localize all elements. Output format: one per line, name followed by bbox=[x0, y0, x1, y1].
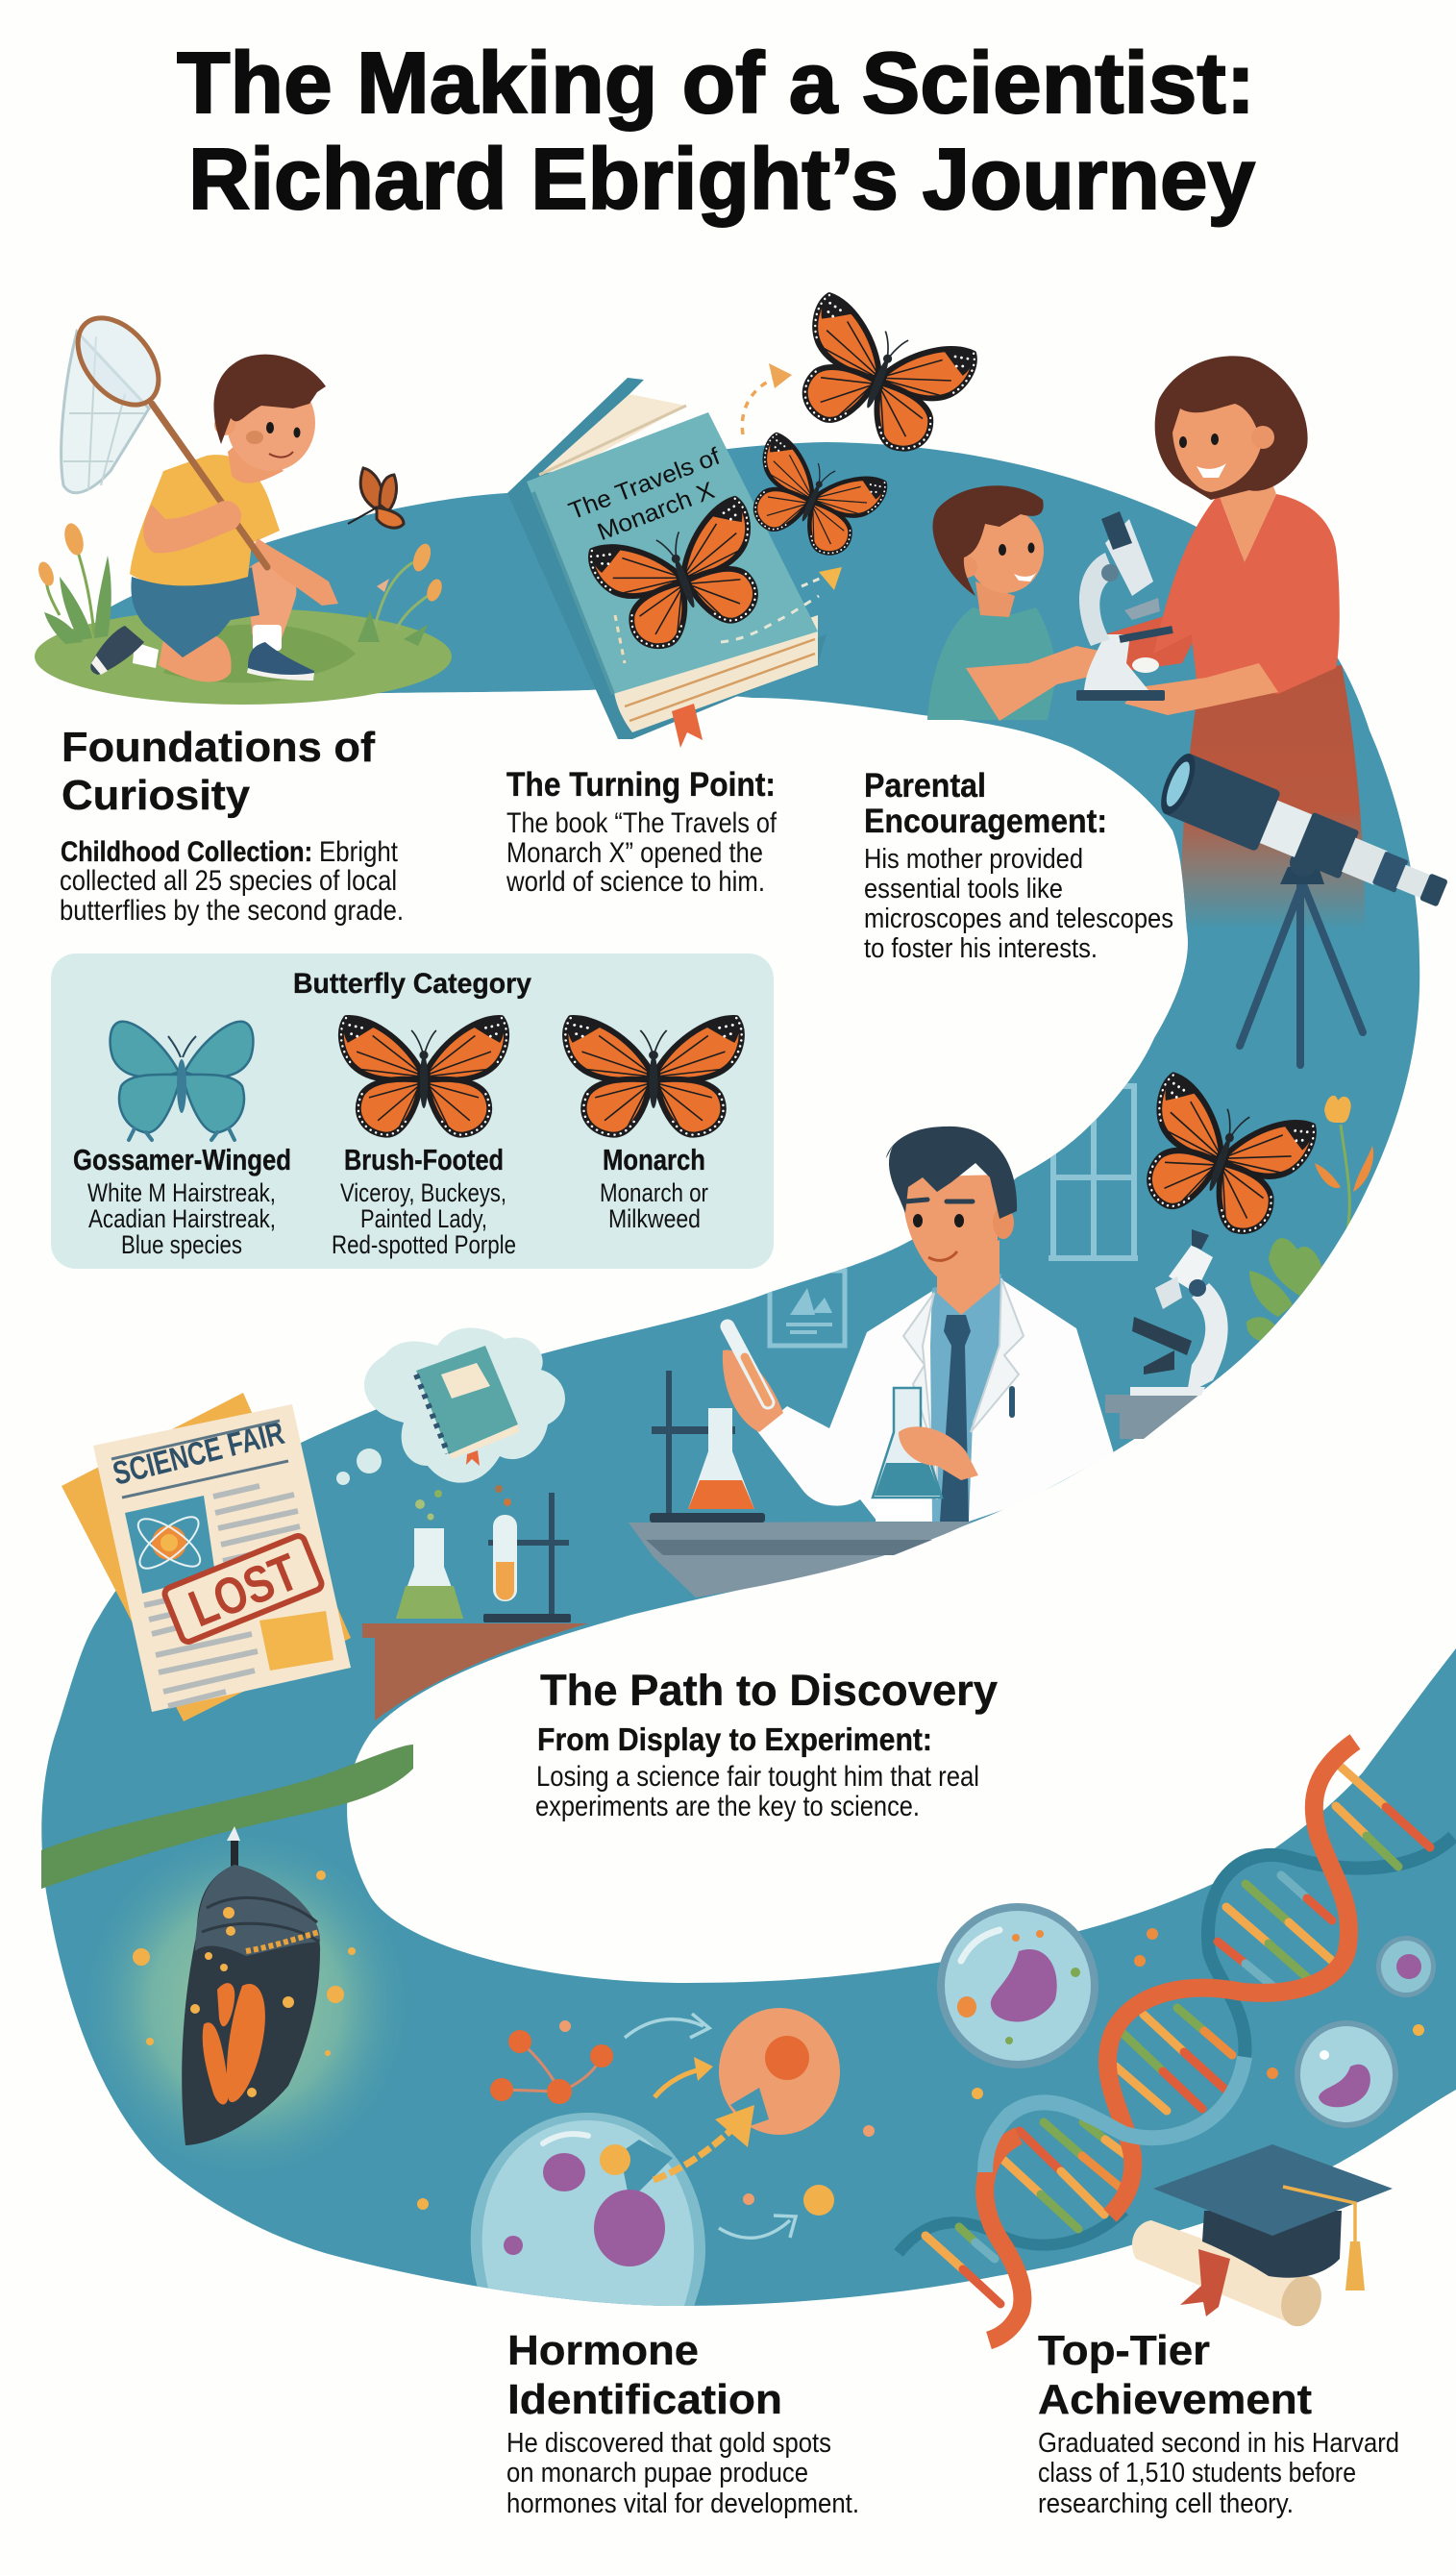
bookmark bbox=[672, 704, 703, 748]
thought cloud with notebook bbox=[336, 1327, 565, 1485]
category: brush-footed: Viceroy, Buckeys, bbox=[340, 1178, 506, 1207]
panel heading: Butterfly Category bbox=[293, 968, 531, 1000]
section: the path to discovery: From Display to Experiment: bbox=[537, 1721, 932, 1757]
section: foundations of curiosity: Curiosity bbox=[62, 772, 251, 819]
butterfly by the window bbox=[1126, 1074, 1318, 1245]
section: the turning point: Monarch X” opened the bbox=[506, 837, 763, 869]
section: top-tier achievement: class of 1,510 students before bbox=[1038, 2458, 1356, 2488]
illustration: mother bbox=[1076, 356, 1365, 929]
mother sleeve behind microscope bbox=[1105, 577, 1201, 673]
category: monarch: Monarch bbox=[603, 1143, 705, 1176]
book title: Monarch X bbox=[594, 477, 719, 546]
window bbox=[1049, 1086, 1138, 1259]
illustration: telescope on tripod bbox=[1154, 749, 1455, 1065]
green flask bbox=[396, 1490, 463, 1619]
molecule bbox=[490, 2020, 613, 2104]
lapels bbox=[903, 1278, 1024, 1499]
illustration: school lab bench with flask and test tube bbox=[362, 1485, 588, 1721]
butterfly net bbox=[62, 303, 175, 493]
tie bbox=[940, 1315, 971, 1522]
mother head bbox=[1155, 356, 1308, 500]
helix rungs bbox=[925, 1768, 1430, 2304]
silk stem bbox=[231, 1836, 238, 1869]
lab microscope bbox=[1130, 1229, 1228, 1396]
section: the path to discovery: The Path to Discovery bbox=[540, 1666, 998, 1715]
mother hands bbox=[1124, 663, 1278, 715]
wall picture bbox=[770, 1271, 845, 1346]
tiny cell bbox=[1376, 1936, 1436, 1997]
section: hormone identification: Identification bbox=[507, 2376, 782, 2423]
boy arms bbox=[143, 505, 238, 553]
test tube stand bbox=[483, 1485, 571, 1622]
gold ball bbox=[600, 2144, 630, 2175]
section: the turning point: The Turning Point: bbox=[506, 766, 776, 804]
section: top-tier achievement: researching cell theory. bbox=[1038, 2488, 1294, 2519]
book cover butterfly bbox=[587, 497, 778, 659]
large cell bbox=[937, 1903, 1098, 2068]
category: brush-footed: Brush-Footed bbox=[344, 1143, 504, 1176]
flying monarch butterfly, small bbox=[737, 433, 888, 565]
wooden table bbox=[362, 1623, 588, 1721]
section: parental encouragement: Encouragement: bbox=[864, 803, 1107, 840]
category: gossamer-winged bbox=[73, 1022, 291, 1259]
section: hormone identification: He discovered that gold spots bbox=[506, 2428, 831, 2459]
second boy shirt bbox=[927, 607, 1057, 720]
gold spots bbox=[133, 1870, 429, 2210]
large pale cell bbox=[471, 2113, 705, 2326]
orange flask on stand bbox=[650, 1371, 765, 1523]
branch bbox=[41, 1745, 413, 1889]
section: foundations of curiosity: collected all 25 species of local bbox=[60, 865, 397, 897]
blue flask with hand bbox=[873, 1388, 978, 1522]
section: foundations of curiosity: butterflies by the second grade. bbox=[60, 895, 404, 927]
table, right bbox=[1105, 1395, 1199, 1439]
blue strand bbox=[985, 2057, 1245, 2172]
orange cell bbox=[719, 2008, 840, 2135]
section: the turning point bbox=[506, 766, 777, 898]
panel: butterfly category bbox=[51, 953, 774, 1269]
mother dress bbox=[1153, 494, 1340, 694]
chrysalis upper segments bbox=[195, 1865, 320, 1956]
scientist head bbox=[886, 1127, 1017, 1315]
small cell bbox=[1295, 2020, 1398, 2128]
notebook icon bbox=[416, 1346, 519, 1466]
category: gossamer-winged: Blue species bbox=[121, 1230, 242, 1259]
category: brush-footed bbox=[332, 1018, 516, 1259]
section: top-tier achievement: Graduated second in his Harvard bbox=[1038, 2428, 1399, 2459]
lab coat bbox=[757, 1279, 1114, 1522]
second boy arm bbox=[966, 646, 1113, 721]
section: parental encouragement: Parental bbox=[864, 767, 986, 805]
section: top-tier achievement: Achievement bbox=[1038, 2376, 1312, 2423]
coat pen bbox=[1009, 1389, 1015, 1415]
section: foundations of curiosity: Foundations of bbox=[62, 724, 375, 771]
category: brush-footed: Painted Lady, bbox=[360, 1204, 487, 1233]
illustration: DNA helix and cells bbox=[899, 1742, 1453, 2340]
small butterfly near the boy bbox=[348, 468, 404, 528]
hand with test tube bbox=[723, 1326, 783, 1432]
illustration: diploma scroll bbox=[1132, 2220, 1328, 2332]
book title bbox=[565, 443, 734, 553]
section: the path to discovery: Losing a science fair tought him that real bbox=[536, 1761, 979, 1793]
chrysalis body bbox=[182, 1865, 320, 2145]
section: top-tier achievement bbox=[1038, 2327, 1399, 2519]
section: the path to discovery bbox=[535, 1666, 998, 1822]
mother neck bbox=[1219, 461, 1276, 562]
section: top-tier achievement: Top-Tier bbox=[1038, 2327, 1210, 2374]
category: brush-footed: Red-spotted Porple bbox=[332, 1230, 516, 1259]
section: the turning point: world of science to him. bbox=[506, 866, 765, 898]
section: foundations of curiosity: Childhood Collection: bbox=[61, 836, 312, 868]
dashed arrows bbox=[742, 363, 842, 590]
section: foundations of curiosity bbox=[60, 724, 404, 927]
illustration: boy with butterfly net on grass bbox=[35, 303, 452, 705]
illustration: chrysalis on branch bbox=[41, 1745, 429, 2210]
illustration: hormone cells bbox=[471, 2008, 983, 2326]
gold particles bbox=[743, 2088, 983, 2216]
category: gossamer-winged: Acadian Hairstreak, bbox=[88, 1204, 276, 1233]
illustration: science fair newspaper bbox=[62, 1393, 351, 1721]
second boy head bbox=[933, 485, 1044, 617]
winding ribbon path bbox=[41, 442, 1456, 2306]
illustration: The Travels of Monarch X book bbox=[507, 378, 827, 748]
illustration: graduation cap bbox=[1153, 2144, 1393, 2290]
mother skirt bbox=[1180, 665, 1365, 929]
headline: SCIENCE FAIR bbox=[110, 1415, 288, 1493]
section: hormone identification bbox=[506, 2327, 859, 2519]
atom image bbox=[125, 1496, 215, 1594]
glow bbox=[106, 1856, 386, 2153]
boy shirt bbox=[130, 455, 280, 585]
section: hormone identification: hormones vital for development. bbox=[506, 2488, 859, 2519]
microscope held by mother and boy bbox=[1076, 511, 1172, 701]
shirt and collar bbox=[930, 1274, 1001, 1522]
section: parental encouragement bbox=[864, 767, 1173, 964]
orange strand bbox=[1107, 1742, 1355, 2216]
category: gossamer-winged: Gossamer-Winged bbox=[73, 1143, 291, 1176]
section: the turning point: The book “The Travels of bbox=[506, 807, 777, 839]
boy head bbox=[213, 355, 326, 483]
section: foundations of curiosity: Ebright bbox=[319, 836, 399, 868]
title: The Making of a Scientist: bbox=[177, 36, 1255, 132]
yellow block bbox=[259, 1611, 333, 1671]
category: monarch bbox=[565, 1018, 742, 1233]
category: monarch: Monarch or bbox=[600, 1178, 708, 1207]
text lines bbox=[144, 1486, 304, 1706]
gold band bbox=[246, 1932, 319, 1951]
book title: The Travels of bbox=[565, 443, 724, 525]
category: gossamer-winged: White M Hairstreak, bbox=[87, 1178, 276, 1207]
section: parental encouragement: microscopes and telescopes bbox=[864, 904, 1173, 934]
title bbox=[177, 36, 1255, 228]
boy legs and shoes bbox=[90, 559, 314, 681]
section: the path to discovery: experiments are the key to science. bbox=[535, 1791, 920, 1822]
floating particles bbox=[1134, 1928, 1424, 2079]
wing patches bbox=[203, 1983, 265, 2104]
back strand bbox=[899, 2211, 1124, 2253]
category: monarch: Milkweed bbox=[608, 1204, 701, 1233]
LOST stamp: LOST bbox=[182, 1543, 307, 1638]
illustration: boy with microscope bbox=[927, 485, 1113, 721]
section: parental encouragement: to foster his interests. bbox=[864, 933, 1098, 964]
net handle bbox=[152, 404, 267, 567]
pale arrows bbox=[625, 2014, 796, 2238]
flying monarch butterfly, large bbox=[781, 293, 978, 463]
title: Richard Ebright’s Journey bbox=[188, 132, 1255, 228]
boy shorts bbox=[131, 567, 259, 657]
yellow arrows bbox=[654, 2057, 754, 2180]
section: hormone identification: Hormone bbox=[507, 2327, 699, 2374]
section: parental encouragement: essential tools like bbox=[864, 874, 1063, 904]
illustration: scientist lab scene bbox=[629, 1074, 1373, 1597]
plant on ribbon edge bbox=[1246, 1096, 1373, 1341]
section: hormone identification: on monarch pupae produce bbox=[506, 2458, 808, 2488]
section: parental encouragement: His mother provided bbox=[864, 844, 1083, 875]
main table bbox=[629, 1522, 972, 1597]
